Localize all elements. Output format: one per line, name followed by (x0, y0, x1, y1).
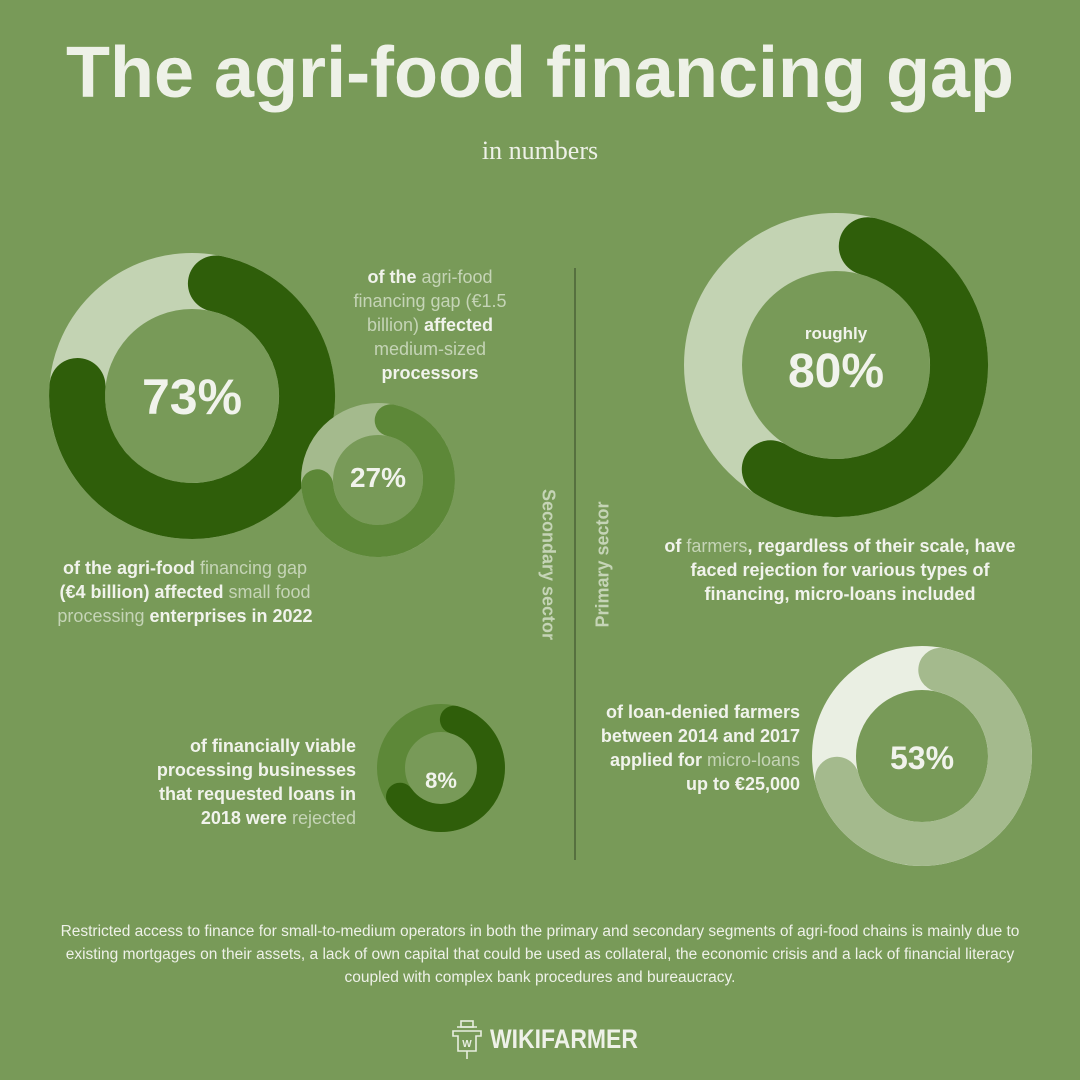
text: 53% description: of loan-denied farmers between 2014 and 2017 applied for micro-loans up to €25,000 (601, 702, 800, 794)
label: primary sector: Primary sector (592, 501, 612, 628)
title: The agri-food financing gap (66, 33, 1014, 113)
logo: WIKIFARMER (490, 1024, 638, 1054)
number: 27%: 27% (350, 462, 406, 493)
subtitle: in numbers (482, 136, 598, 165)
number: 8%: 8% (425, 768, 457, 793)
footer text: Restricted access to finance for small-to-medium operators in both the primary and secondary segments of agri-food chains is mainly due to existing mortgages on their assets, a lack of own capital that could be used as collateral, the economic crisis and a lack of financial literacy coupled with complex bank procedures and bureaucracy. (61, 923, 1019, 986)
label: secondary sector: Secondary sector (538, 489, 558, 640)
text: farmers rejection: of farmers, regardless of their scale, have faced rejection for various types of financing, micro-loans included (664, 536, 1016, 604)
number: 80%: 80% (788, 345, 884, 398)
donut: 27% (317, 419, 439, 541)
icon: scarecrow (452, 1020, 482, 1059)
donut: 8% (391, 718, 491, 818)
text: small food processing: of the agri-food financing gap (€4 billion) affected small food processing enterprises in 2022 (57, 558, 313, 626)
logo (452, 1020, 638, 1059)
donut: 80% (713, 242, 959, 488)
number: 73%: 73% (142, 369, 242, 425)
donut: 53% (834, 668, 1010, 844)
icon: scarecrow: W (462, 1039, 472, 1050)
text: medium-sized processors: of the agri-food financing gap (€1.5 billion) affected medium-sized processors (353, 267, 507, 383)
text: 8% description: of financially viable processing businesses that requested loans in 2018 were rejected (157, 736, 356, 828)
donut: 73% (77, 281, 307, 511)
number: 53%: 53% (890, 740, 954, 776)
number: 80%: roughly (805, 324, 867, 343)
